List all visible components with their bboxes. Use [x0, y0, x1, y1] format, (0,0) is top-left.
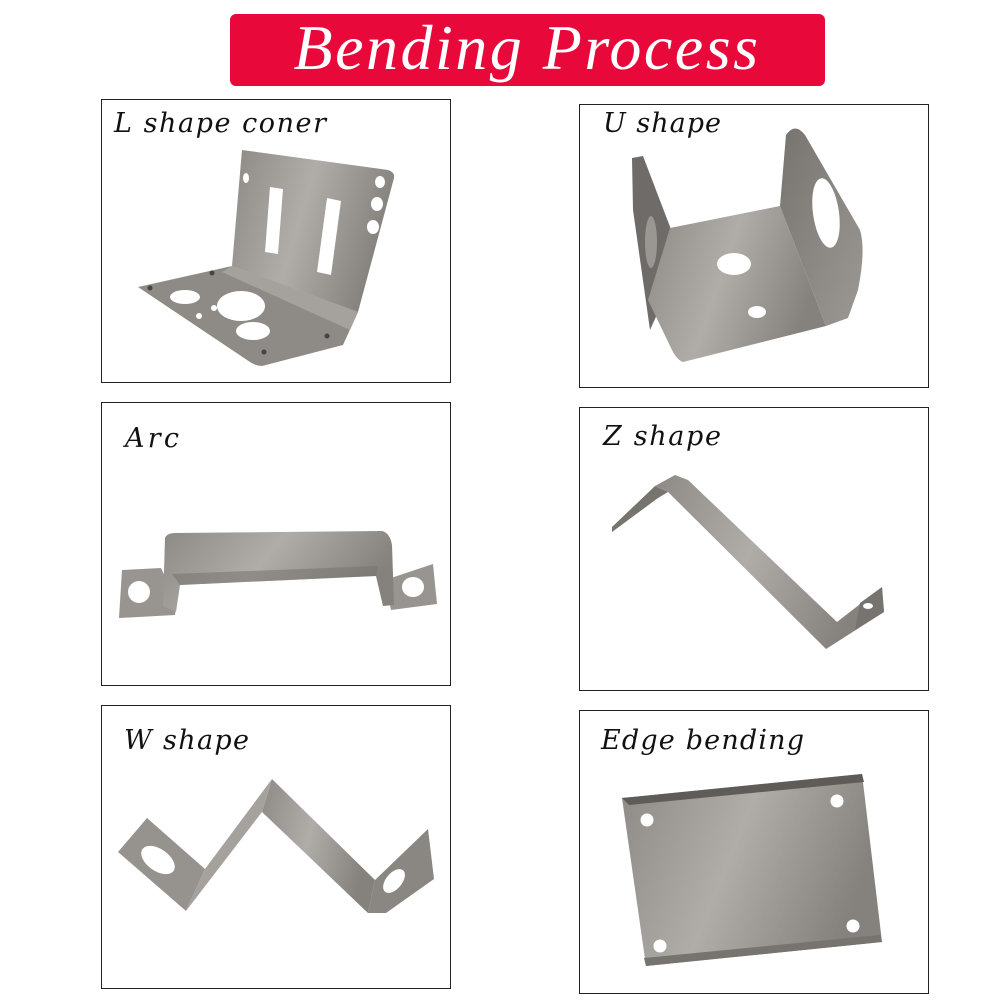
- label: Arc: Arc: [122, 423, 179, 454]
- panel: Arc: [102, 402, 450, 686]
- panel: L shape corner: [102, 100, 450, 382]
- part: arc bracket: [119, 531, 437, 618]
- part: Z bracket: [612, 475, 884, 649]
- panel: U shape: [580, 104, 928, 388]
- part: U bracket: [632, 128, 863, 362]
- panel: Z shape: [580, 408, 928, 690]
- label: L shape coner: L shape coner: [113, 108, 328, 139]
- panel: W shape: [102, 706, 450, 988]
- part: L bracket: [138, 150, 394, 366]
- label: Z shape: Z shape: [602, 421, 721, 452]
- label: W shape: W shape: [124, 725, 249, 756]
- label: Edge bending: Edge bending: [600, 725, 804, 756]
- title banner: Bending Process: [293, 12, 761, 83]
- part: edge-bent tray: [622, 774, 882, 966]
- panel: Edge bending: [580, 710, 928, 994]
- part: W bracket: [118, 779, 434, 913]
- label: U shape: U shape: [603, 108, 721, 139]
